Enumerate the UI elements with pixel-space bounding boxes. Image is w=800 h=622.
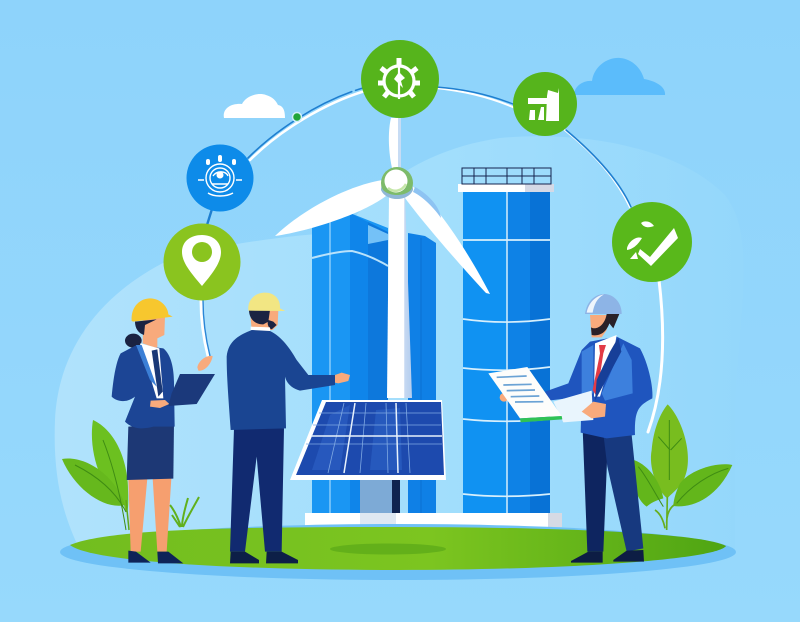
arc node dot [292, 112, 302, 122]
man helmet [248, 293, 285, 311]
engineer left hand [500, 393, 508, 402]
man hand [335, 373, 350, 383]
engineer hair and beard [591, 314, 619, 335]
woman hand on laptop [150, 400, 169, 408]
right plant [631, 404, 732, 530]
engineer helmet [585, 294, 622, 314]
laptop [168, 374, 215, 406]
ground: water [60, 524, 736, 580]
icon: globe network [186, 144, 254, 212]
ground: lawn [70, 527, 726, 570]
woman hair bun [125, 334, 142, 348]
woman jacket [112, 345, 175, 428]
woman skirt [127, 423, 174, 480]
engineer right hand [582, 402, 606, 418]
building: right tower [458, 168, 554, 513]
document [488, 367, 562, 422]
back paper [553, 391, 593, 422]
cloud: blue [574, 58, 665, 95]
wind turbine [275, 118, 490, 398]
man hair and beard [249, 310, 277, 329]
engineer lapel [595, 337, 621, 401]
man shoes [230, 552, 298, 563]
cloud: white [224, 94, 285, 118]
woman shoes [128, 551, 183, 563]
man legs [230, 428, 284, 552]
ground: lawn shadow [330, 544, 446, 554]
man jacket [227, 330, 335, 430]
solar panel [290, 400, 446, 480]
icon: gear and bolt [361, 40, 439, 118]
engineer jacket [545, 337, 652, 438]
woman hair [135, 319, 157, 335]
person: woman with laptop [112, 298, 215, 563]
left plant [62, 420, 199, 530]
man head [250, 310, 278, 330]
engineer legs [582, 420, 607, 552]
engineer shirt [594, 335, 617, 397]
woman helmet [132, 298, 173, 322]
icon: bar chart [513, 72, 577, 136]
woman raised hand [197, 356, 213, 371]
woman shirt and tie [136, 343, 163, 398]
engineer shoes [571, 550, 644, 563]
network arc [201, 87, 663, 432]
background blob [55, 136, 744, 550]
icon: check mark [612, 202, 692, 282]
woman legs [128, 478, 171, 552]
icon: map pin [164, 224, 240, 300]
person: man in hard hat [227, 293, 350, 563]
engineer tie [593, 345, 606, 397]
engineer head [590, 315, 608, 337]
building bases [305, 513, 562, 527]
building: left tower [312, 213, 436, 513]
woman face [143, 317, 165, 348]
person: engineer with document [488, 294, 652, 563]
man collar [251, 327, 270, 333]
